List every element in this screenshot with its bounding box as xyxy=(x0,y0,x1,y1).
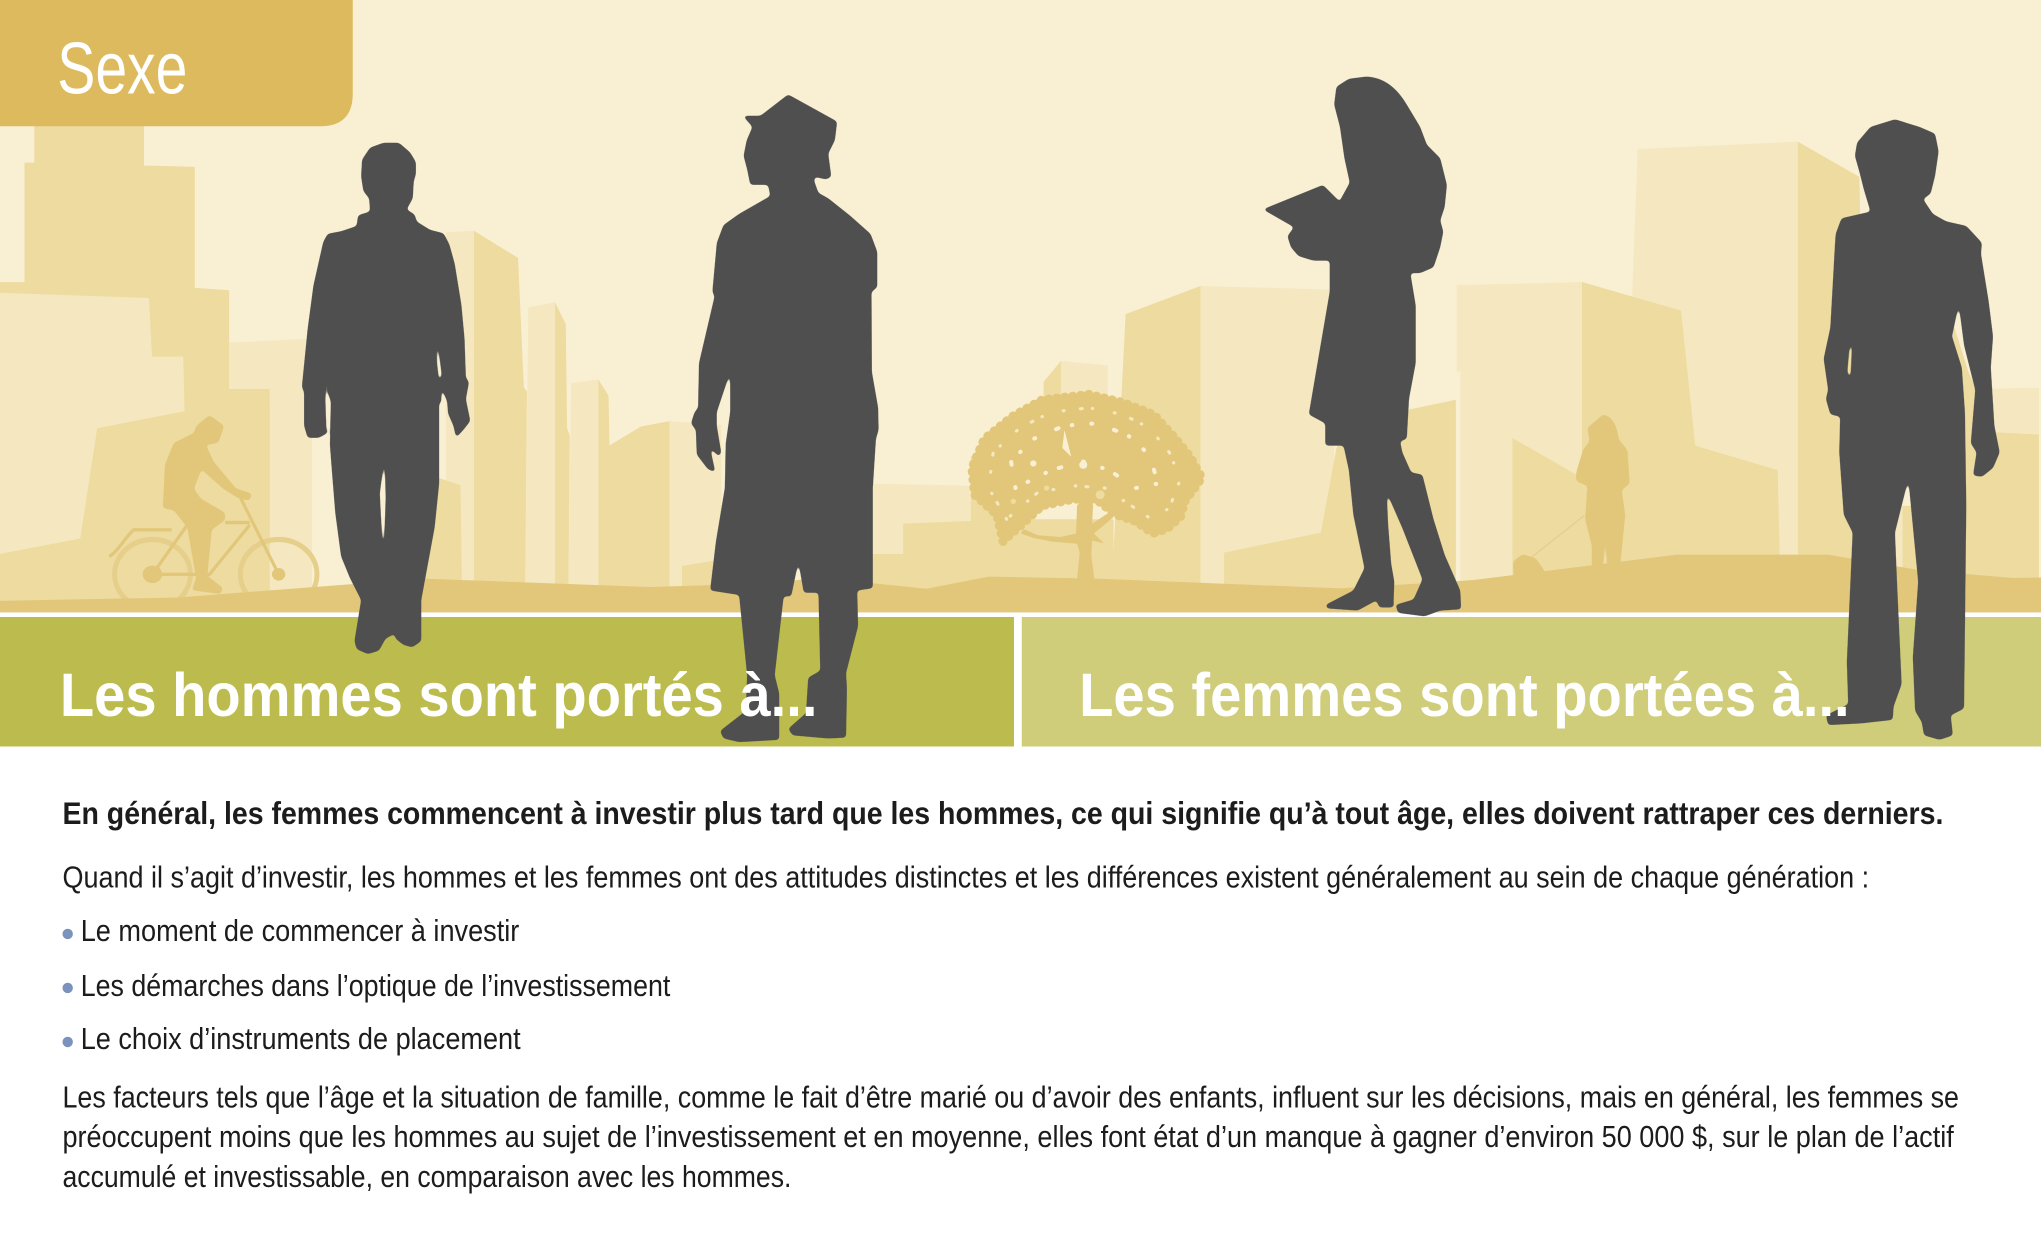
background figure: woman walking a dog xyxy=(1513,414,1630,583)
heading: men: Les hommes sont portés à... xyxy=(60,661,817,729)
bullet list: Le choix d’instruments de placement xyxy=(81,1022,521,1056)
heading: women: Les femmes sont portées à... xyxy=(1079,661,1850,729)
buildings: centre group xyxy=(605,286,1354,595)
panel: women heading band xyxy=(1022,617,2041,747)
ground hills xyxy=(0,555,2041,613)
bullet list: Le moment de commencer à investir xyxy=(81,914,519,948)
title tab xyxy=(0,0,353,126)
silhouette: woman standing xyxy=(1824,119,2000,740)
background figure: tree xyxy=(972,394,1202,579)
white separator line xyxy=(0,612,2041,617)
silhouette: woman reading xyxy=(1263,77,1461,616)
bullet list xyxy=(62,914,671,1056)
panel: men heading band xyxy=(0,617,1014,747)
background figure: cyclist xyxy=(109,415,317,609)
closing paragraph xyxy=(62,1081,1959,1194)
silhouette: man in jacket xyxy=(302,143,470,654)
silhouette: man with hat xyxy=(691,94,879,742)
buildings: right group xyxy=(1340,142,2039,591)
title tab: Sexe xyxy=(57,29,187,110)
panel: city background xyxy=(0,0,2041,617)
bullet list: Les démarches dans l’optique de l’investissement xyxy=(81,969,671,1003)
buildings: left group xyxy=(0,121,620,602)
closing paragraph: accumulé et investissable, en comparaison avec les hommes. xyxy=(62,1160,791,1194)
